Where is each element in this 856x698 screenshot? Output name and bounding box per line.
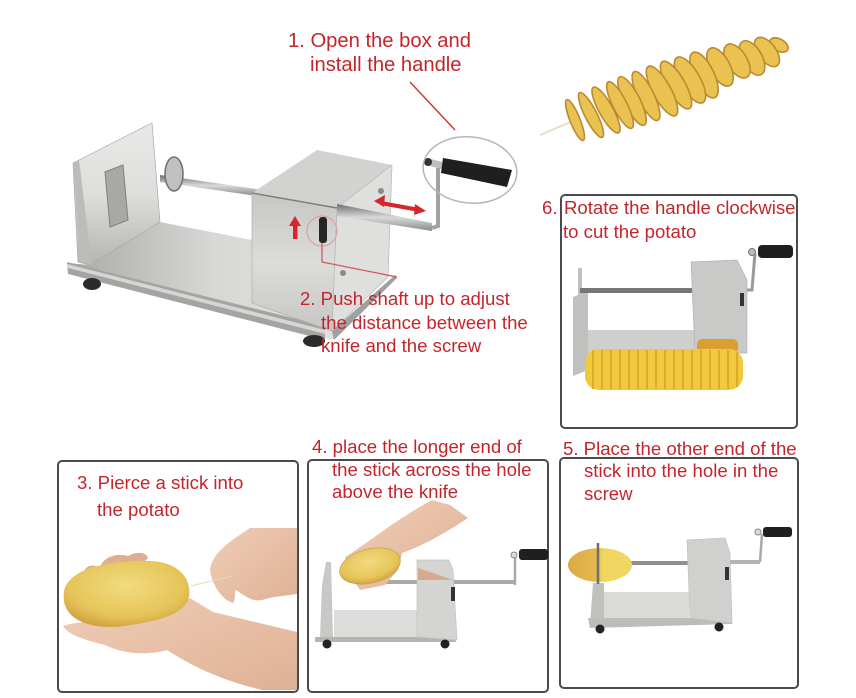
hand holding potato: [63, 553, 297, 690]
crank shaft: [337, 204, 432, 231]
blade plate: [73, 123, 160, 265]
step 2 text: knife and the screw: [321, 335, 482, 356]
step 6 text: [542, 197, 796, 242]
shaft callout circle: [307, 216, 337, 246]
step 2 text: [300, 288, 528, 356]
knife slot: [319, 217, 327, 243]
arrow: push shaft up: [289, 216, 301, 239]
step 1 text: 1. Open the box and: [288, 30, 471, 52]
step 6 text: to cut the potato: [563, 221, 696, 242]
panel: step 3: [58, 461, 298, 692]
machine with potato: [568, 527, 792, 634]
step 3 text: the potato: [97, 499, 180, 520]
handle: [424, 158, 512, 187]
spiral potato photo: [540, 33, 791, 142]
arrow: double headed shaft movement: [374, 195, 426, 215]
arrow: callout line to handle: [410, 82, 455, 130]
panel: step 5: [560, 438, 798, 688]
callout line to step 2: [322, 243, 397, 277]
shaft: [160, 175, 257, 196]
step 5 text: 5. Place the other end of the: [563, 438, 797, 459]
machine with spiral potato: [573, 245, 793, 390]
step 3 text: [77, 472, 243, 520]
step 6 text: 6.: [542, 197, 558, 218]
handle callout circle: [420, 132, 520, 208]
step 2 text: the distance between the: [321, 312, 528, 333]
step 3 text: 3. Pierce a stick into: [77, 472, 243, 493]
step 4 text: [312, 436, 531, 502]
step 6 text: Rotate the handle clockwise: [564, 197, 796, 218]
stick: [191, 576, 232, 586]
hand with stick: [210, 528, 297, 603]
step 1 text: [288, 30, 471, 76]
step 4 text: 4. place the longer end of: [312, 436, 523, 457]
machine with potato in hand: [315, 500, 548, 648]
machine base: [67, 222, 397, 340]
step 5 text: screw: [584, 483, 633, 504]
step 4 text: the stick across the hole: [332, 459, 531, 480]
step 5 text: stick into the hole in the: [584, 460, 778, 481]
step 1 text: install the handle: [310, 54, 462, 76]
step 5 text: [563, 438, 797, 504]
panel: step 4: [308, 436, 548, 692]
panel: step 6: [542, 195, 797, 428]
step 4 text: above the knife: [332, 481, 458, 502]
main slicer machine: [67, 123, 512, 347]
housing box: [252, 150, 392, 331]
step 2 text: 2. Push shaft up to adjust: [300, 288, 511, 309]
